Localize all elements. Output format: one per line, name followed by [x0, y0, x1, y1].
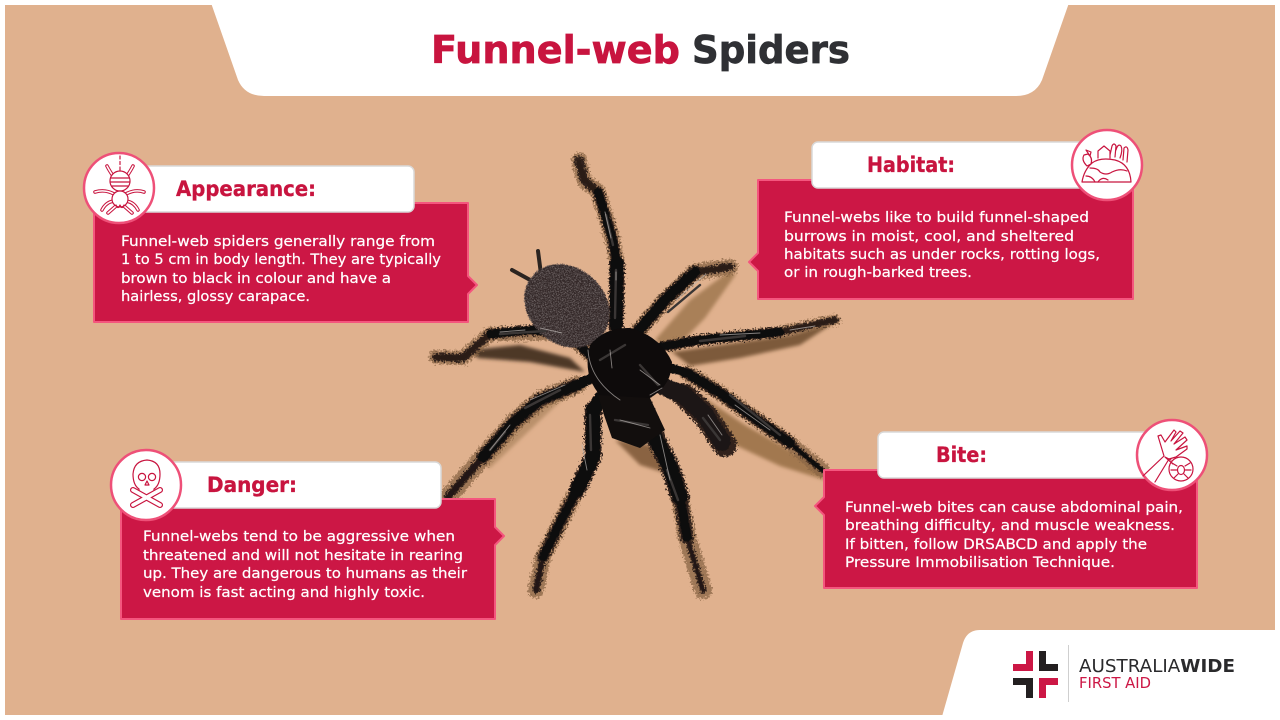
- icon: spider hanging: [84, 153, 154, 223]
- panel: habitat: [749, 130, 1142, 299]
- bite body text: If bitten, follow DRSABCD and apply the: [845, 536, 1147, 553]
- habitat body text: [784, 209, 1100, 281]
- highlights: [490, 212, 815, 500]
- bite heading bar: [878, 432, 1168, 478]
- bite body text: [845, 499, 1183, 571]
- fangs and mouthparts: [598, 395, 665, 448]
- danger body text: venom is fast acting and highly toxic.: [143, 584, 425, 601]
- habitat body text: burrows in moist, cool, and sheltered: [784, 228, 1074, 245]
- habitat body text: Funnel-webs like to build funnel-shaped: [784, 209, 1089, 226]
- outer fringe hairs: [436, 160, 835, 590]
- habitat heading: Habitat:: [867, 153, 955, 178]
- appearance body text: hairless, glossy carapace.: [121, 288, 310, 305]
- icon: burrow mound: [1072, 130, 1142, 200]
- logo mark: cross: [1013, 651, 1058, 698]
- habitat body text: habitats such as under rocks, rotting logs,: [784, 246, 1100, 263]
- logo wordmark: FIRST AID: [1079, 674, 1151, 692]
- habitat body text: or in rough-barked trees.: [784, 264, 972, 281]
- danger heading bar: [146, 462, 441, 508]
- danger heading: Danger:: [207, 473, 297, 498]
- title: [431, 28, 850, 72]
- appearance body text: [121, 233, 441, 305]
- danger body text: threatened and will not hesitate in rearing: [143, 547, 463, 564]
- dark hair layer: [436, 160, 835, 590]
- abdomen: [507, 247, 627, 365]
- appearance body text: 1 to 5 cm in body length. They are typically: [121, 251, 441, 268]
- leg shadows: [470, 272, 835, 480]
- appearance body text: Funnel-web spiders generally range from: [121, 233, 435, 250]
- logo wordmark: [1079, 656, 1235, 692]
- appearance body text: brown to black in colour and have a: [121, 270, 391, 287]
- bite body text: Pressure Immobilisation Technique.: [845, 554, 1115, 571]
- habitat heading bar: [812, 142, 1102, 188]
- appearance heading bar: [119, 166, 414, 212]
- panel: bite: [815, 420, 1207, 588]
- icon: bitten hand: [1137, 420, 1207, 490]
- bite body text: Funnel-web bites can cause abdominal pain,: [845, 499, 1183, 516]
- danger body text: Funnel-webs tend to be aggressive when: [143, 528, 455, 545]
- panel: danger: [111, 450, 504, 619]
- title banner: [210, 0, 1070, 96]
- danger body text: up. They are dangerous to humans as their: [143, 565, 467, 582]
- logo wordmark: AUSTRALIAWIDE: [1079, 656, 1235, 677]
- cephalothorax: [588, 328, 672, 404]
- appearance heading: Appearance:: [176, 177, 316, 202]
- glossy legs: [436, 162, 835, 590]
- spinnerets: [512, 251, 541, 281]
- bite text box: [815, 470, 1197, 588]
- danger text box: [121, 499, 504, 619]
- habitat text box: [749, 180, 1133, 299]
- appearance text box: [94, 203, 477, 322]
- bite body text: breathing difficulty, and muscle weakness.: [845, 517, 1175, 534]
- danger body text: [143, 528, 467, 601]
- title: Spiders: [692, 28, 850, 72]
- title: Funnel-web: [431, 28, 680, 72]
- spider photo illustration: [436, 160, 835, 590]
- panel: appearance: [84, 153, 477, 322]
- logo panel: [941, 630, 1280, 720]
- bite heading: Bite:: [936, 443, 987, 468]
- icon: skull and crossbones: [111, 450, 181, 520]
